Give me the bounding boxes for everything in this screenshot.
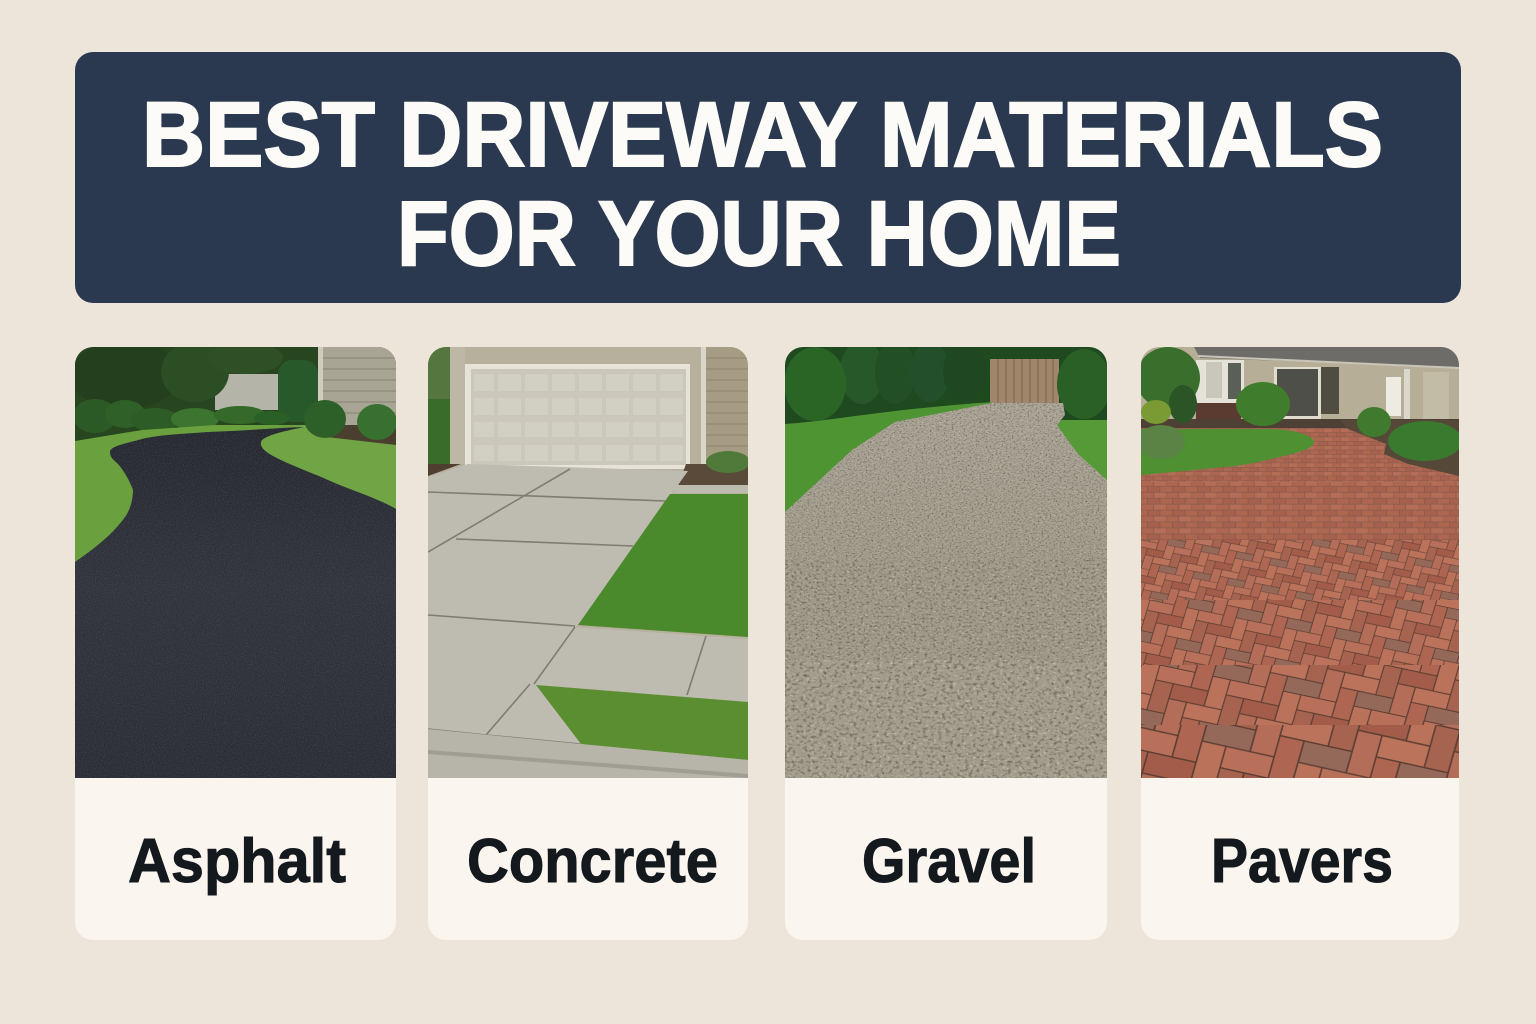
concrete slab bbox=[428, 464, 748, 744]
wooden fence bbox=[990, 359, 1059, 403]
title banner bbox=[75, 52, 1461, 303]
paving bricks bbox=[1141, 428, 1459, 778]
label: Concrete: Concrete bbox=[467, 827, 718, 896]
photo: concrete driveway bbox=[428, 347, 750, 778]
label: Asphalt: Asphalt bbox=[128, 827, 346, 896]
title: BEST DRIVEWAY MATERIALS bbox=[142, 84, 1383, 186]
label: Pavers: Pavers bbox=[1211, 827, 1393, 896]
title: FOR YOUR HOME bbox=[397, 183, 1121, 285]
title bbox=[142, 84, 1383, 285]
photo: gravel driveway bbox=[784, 340, 1111, 778]
house windows and doors bbox=[1196, 360, 1449, 419]
tree and shrubs bbox=[1136, 347, 1462, 461]
photo: paver driveway bbox=[1136, 347, 1462, 778]
panel: asphalt bbox=[70, 341, 397, 940]
label: Gravel: Gravel bbox=[862, 827, 1036, 896]
photo: asphalt driveway bbox=[70, 341, 397, 778]
panel: concrete bbox=[428, 347, 750, 940]
panel: gravel bbox=[784, 340, 1111, 940]
garage door bbox=[465, 364, 690, 469]
panel: pavers bbox=[1136, 347, 1462, 940]
